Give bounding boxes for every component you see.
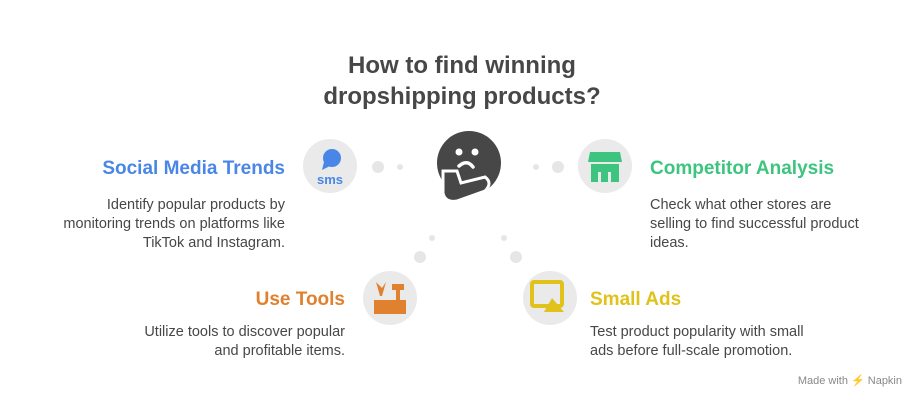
heading: small ads: Small Ads: [590, 289, 681, 310]
text: use tools: Utilize tools to discover popular: [144, 324, 345, 340]
title: [323, 52, 601, 110]
text: competitor analysis: ideas.: [650, 235, 689, 251]
text: competitor analysis: [650, 197, 859, 251]
title: dropshipping products?: [323, 83, 601, 110]
heading: social media trends: Social Media Trends: [102, 158, 285, 179]
heading: competitor analysis: Competitor Analysis: [650, 158, 834, 179]
text: use tools: and profitable items.: [214, 343, 345, 359]
heading: use tools: Use Tools: [256, 289, 345, 310]
text: social media trends: [63, 197, 285, 251]
text: competitor analysis: Check what other stores are: [650, 197, 831, 213]
text: competitor analysis: selling to find successful product: [650, 216, 859, 232]
icon: sms: [303, 139, 357, 193]
icon: small ads: [523, 271, 577, 325]
text: small ads: Test product popularity with small: [590, 324, 804, 340]
footer: made with napkin: Made with ⚡ Napkin: [798, 375, 902, 387]
text: social media trends: Identify popular products by: [107, 197, 285, 213]
icon: store: [578, 139, 632, 193]
title: How to find winning: [348, 52, 576, 79]
icon: tools: [363, 271, 417, 325]
icon: thinking face: [437, 131, 501, 200]
text: social media trends: TikTok and Instagram.: [143, 235, 285, 251]
text: use tools: [144, 324, 345, 359]
text: small ads: ads before full-scale promotion.: [590, 343, 792, 359]
text: small ads: [590, 324, 804, 359]
icon: sms: sms: [317, 172, 343, 187]
text: social media trends: monitoring trends on platforms like: [63, 216, 285, 232]
